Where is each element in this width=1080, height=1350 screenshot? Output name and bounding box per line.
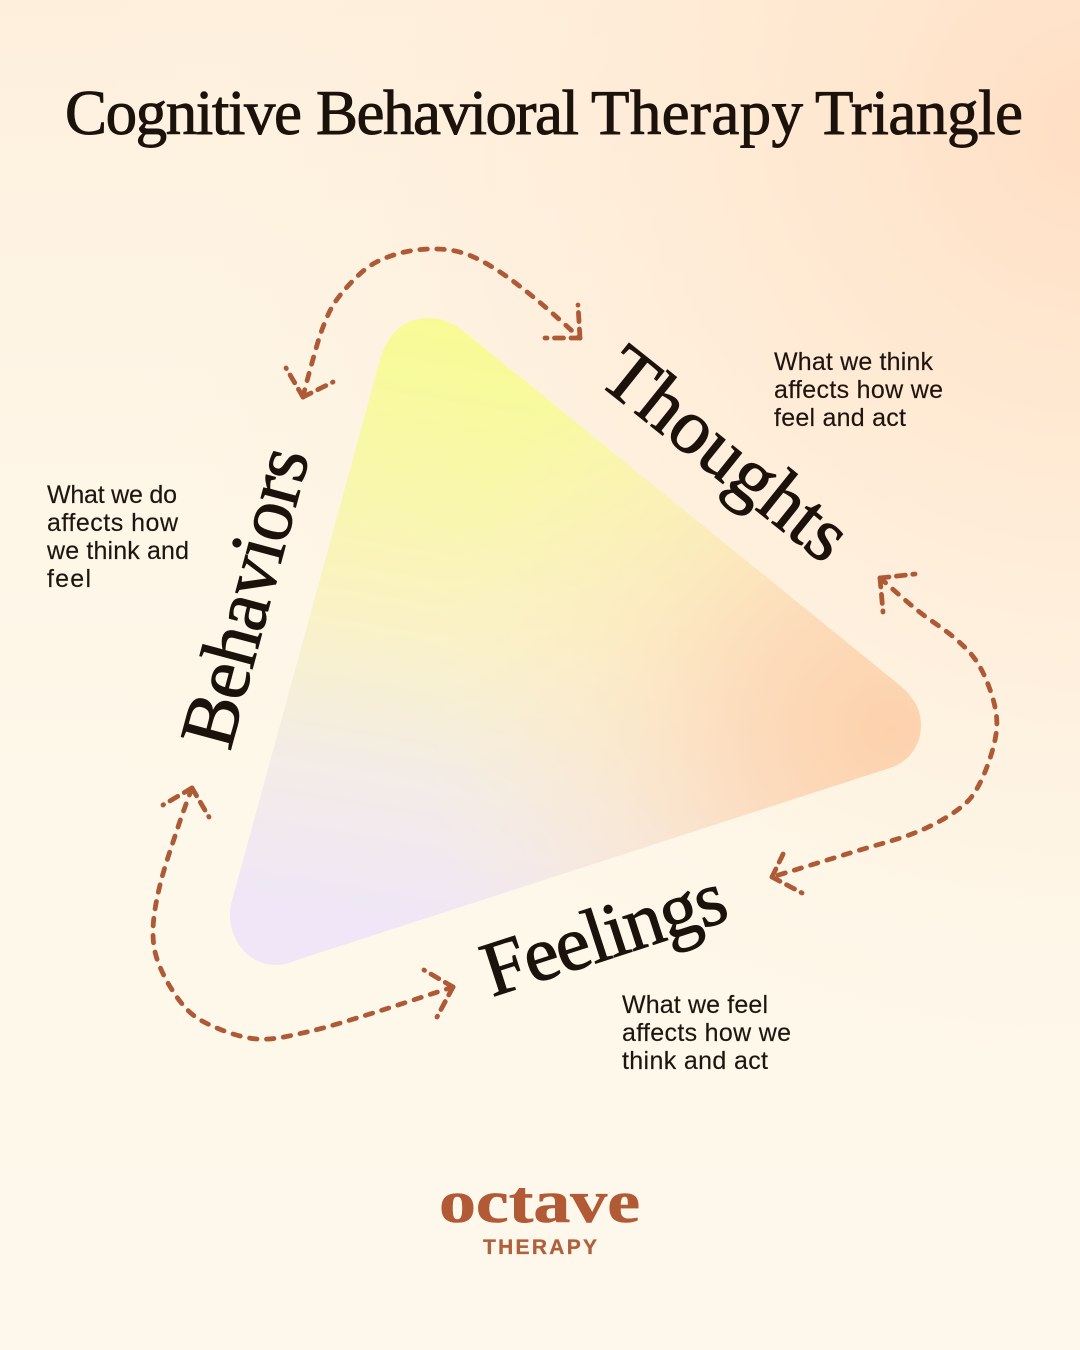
logo [439, 1169, 640, 1259]
label: Thoughts: Thoughts [585, 327, 868, 578]
text: thoughts description: affects how we [774, 376, 943, 404]
text: thoughts description: What we think [774, 348, 934, 376]
title: Behavioral [316, 78, 579, 148]
text: behaviors description: we think and [46, 537, 189, 565]
text: thoughts description: feel and act [774, 404, 906, 432]
title: Cognitive [65, 78, 302, 148]
text: feelings description: affects how we [622, 1019, 791, 1047]
label: Behaviors: Behaviors [162, 437, 326, 756]
arrow: thoughts to feelings [772, 574, 997, 893]
text: behaviors description: feel [47, 565, 91, 593]
text: feelings description: think and act [622, 1047, 768, 1075]
title: Triangle [815, 78, 1023, 148]
text: feelings description: What we feel [622, 991, 768, 1019]
text: behaviors description: What we do [47, 481, 177, 509]
logo: octave [439, 1169, 640, 1235]
title: Therapy [591, 78, 804, 148]
label: Feelings: Feelings [470, 853, 737, 1013]
arrow: feelings to behaviors [153, 788, 453, 1039]
text: behaviors description: affects how [47, 509, 179, 537]
arrow: behaviors to thoughts [286, 249, 580, 397]
gradient triangle [230, 318, 921, 965]
logo: THERAPY [483, 1236, 597, 1259]
